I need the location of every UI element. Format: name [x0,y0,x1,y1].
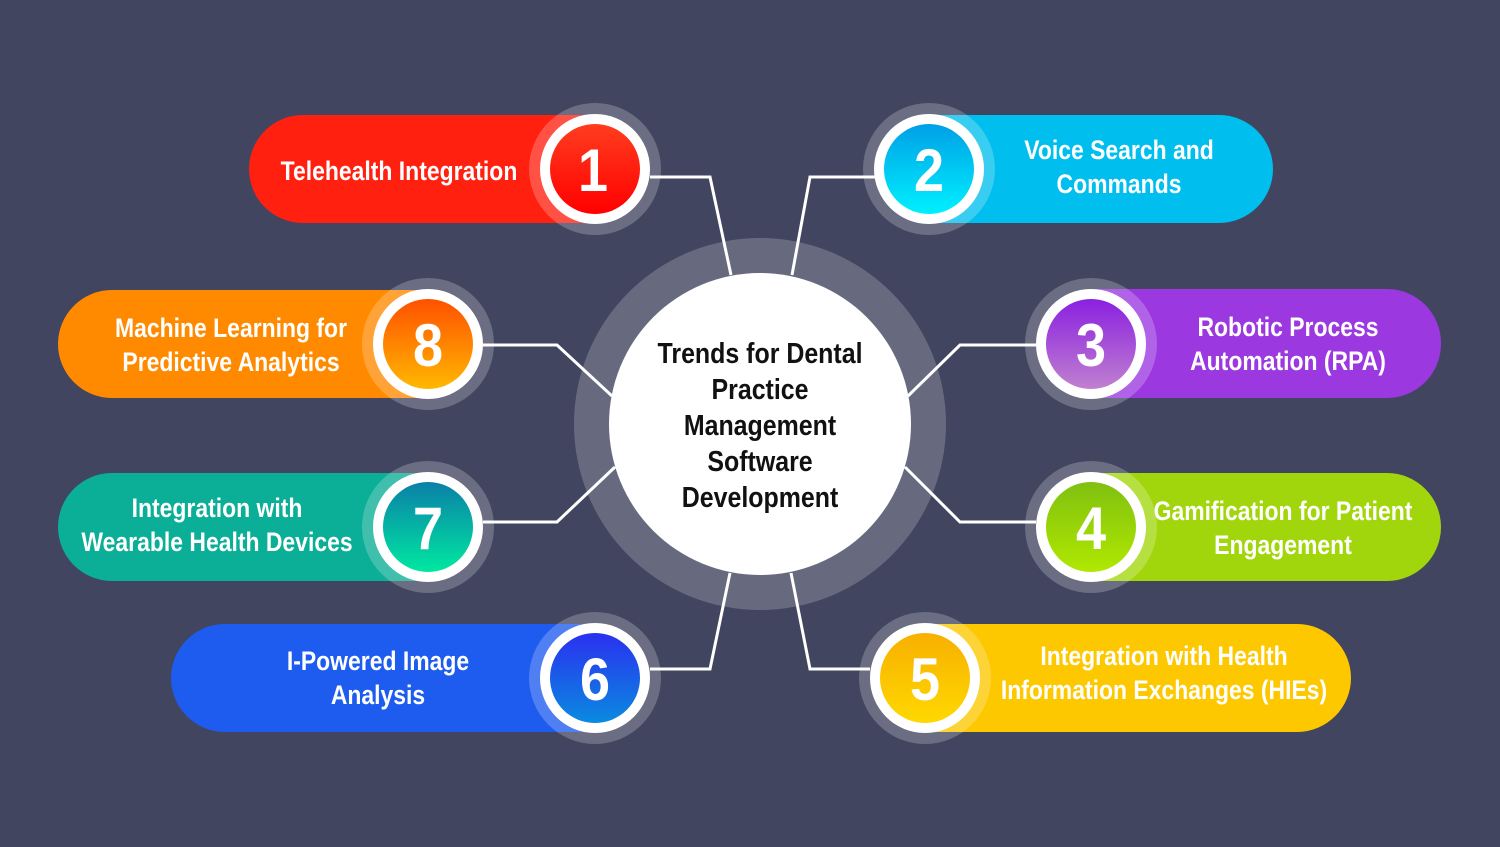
item 3: Robotic Process [1197,312,1379,342]
item 8: Predictive Analytics [122,347,340,377]
item 2: 2 [914,137,944,205]
center title [658,337,862,513]
item 5: Information Exchanges (HIEs) [1001,675,1327,705]
center title: Trends for Dental [658,337,862,369]
item 8 [58,278,494,410]
connector lines [483,177,1036,669]
item 4: Gamification for Patient [1154,496,1413,526]
center title: Development [682,481,838,513]
item 1: Telehealth Integration [281,156,517,186]
item 2: Commands [1057,169,1181,199]
item 7: Integration with [132,493,302,523]
item 1: 1 [578,137,608,205]
item 4: Engagement [1214,530,1352,560]
item 6: Analysis [331,680,425,710]
item 2: Voice Search and [1024,135,1214,165]
item 3: Automation (RPA) [1190,346,1386,376]
item 4: 4 [1076,495,1106,563]
item 5: Integration with Health [1040,641,1288,671]
item 6: I-Powered Image [287,646,469,676]
item 5 [859,612,1351,744]
item 3: 3 [1076,312,1106,380]
item 6: 6 [580,646,610,714]
item 7 [58,461,494,593]
center title: Software [707,445,813,477]
center title: Practice [711,373,809,405]
center hub [574,238,946,610]
item 7: 7 [413,495,443,563]
item 8: 8 [413,312,443,380]
item 6 [171,612,661,744]
item 4 [1025,461,1441,593]
item 5: 5 [910,646,940,714]
item 3 [1025,278,1441,410]
center title: Management [684,409,836,441]
item 2 [863,103,1273,235]
item 8: Machine Learning for [115,313,347,343]
item 7: Wearable Health Devices [81,527,353,557]
item 1 [249,103,661,235]
